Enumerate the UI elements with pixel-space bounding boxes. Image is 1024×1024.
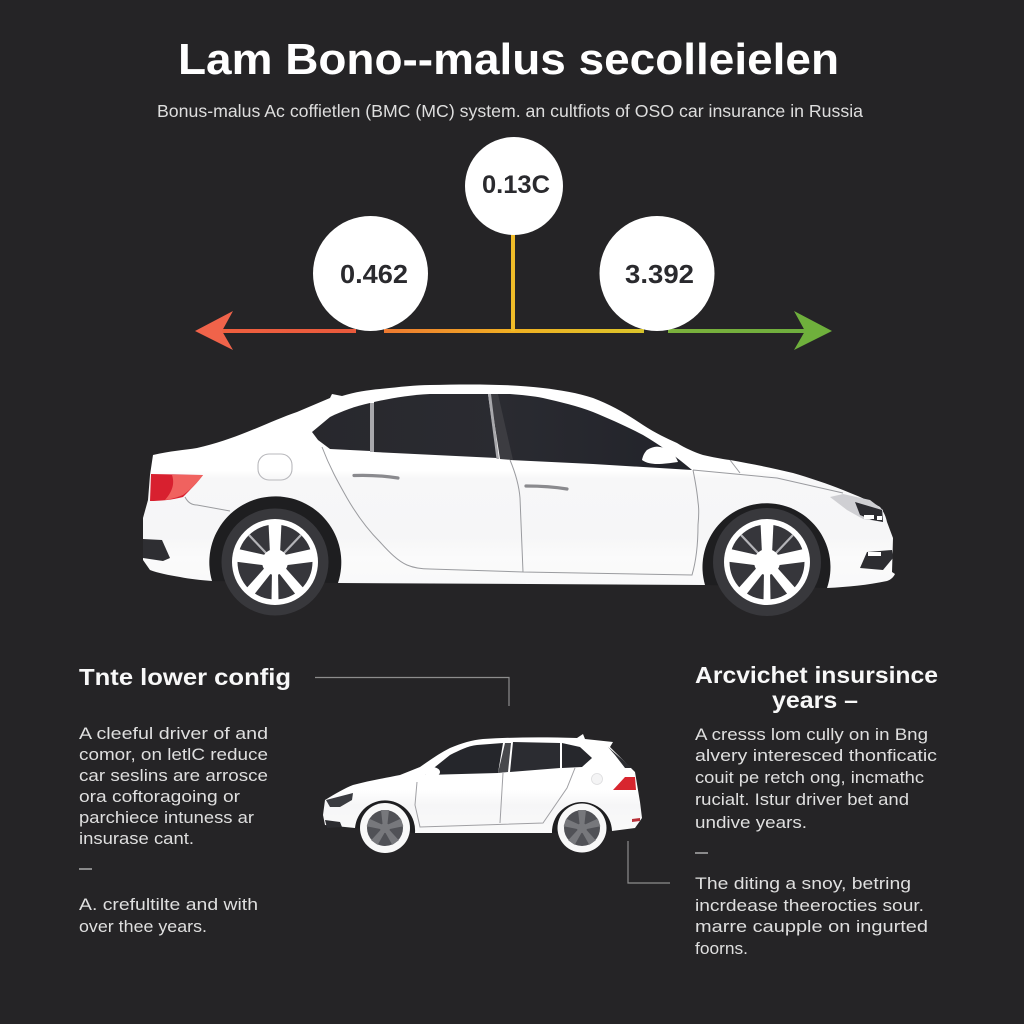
left text block 1: ora coftoragoing or <box>79 787 240 806</box>
right heading: Arcvichet insursince <box>695 662 938 688</box>
circle: 0.13C <box>465 137 563 235</box>
right text block 2: incrdease theerocties sour. <box>695 896 924 915</box>
connector line top <box>315 678 509 706</box>
right text block 1: A cresss lom cully on in Bng <box>695 725 928 744</box>
door lines <box>185 447 843 575</box>
rear wheel <box>222 508 328 616</box>
front wheel <box>360 803 410 853</box>
left text block 1: comor, on letlC reduce <box>79 745 268 764</box>
circle: 0.13C: 0.13C <box>482 171 550 199</box>
right text block 1 <box>695 725 938 853</box>
tail light <box>613 777 636 790</box>
mirror <box>424 767 440 777</box>
rear reflector <box>632 818 640 822</box>
right text block 1: rucialt. Istur driver bet and <box>695 790 909 809</box>
right text block 1: alvery interesced thonficatic <box>695 746 938 765</box>
tail light <box>150 474 203 501</box>
right heading <box>695 662 938 713</box>
connector line bottom <box>628 841 670 883</box>
door handles <box>354 475 398 478</box>
headlight <box>830 494 883 522</box>
arrow: right green <box>794 311 832 350</box>
arrow: left red <box>195 311 233 350</box>
front grille <box>860 550 893 570</box>
scale line <box>222 232 805 331</box>
subtitle: Bonus-malus Ac coffietlen (BMC (MC) system. an cultfiots of OSO car insurance in Russia <box>157 101 863 121</box>
front wheel <box>713 508 821 616</box>
coefficient scale chart <box>195 137 832 350</box>
fuel cap <box>592 774 602 784</box>
left text block 2: over thee years. <box>79 917 207 936</box>
left text block 1: A cleeful driver of and <box>79 724 268 743</box>
circle: 3.392: 3.392 <box>625 259 694 289</box>
front fog light <box>325 820 342 828</box>
rear reflector <box>143 539 170 561</box>
left text block 1: parchiece intuness ar <box>79 808 254 827</box>
left heading: Tnte lower config <box>79 664 291 690</box>
door lines <box>415 768 575 827</box>
right text block 1: undive years. <box>695 813 807 832</box>
large white sedan <box>143 384 895 616</box>
car body <box>143 384 895 588</box>
right text block 2 <box>695 874 928 958</box>
fuel cap <box>258 454 292 480</box>
right text block 2: marre caupple on ingurted <box>695 917 928 936</box>
left text block 1: insurase cant. <box>79 829 194 848</box>
left text block 2: A. crefultilte and with <box>79 895 258 914</box>
left text block 1: car seslins are arrosce <box>79 766 268 785</box>
windows <box>312 394 692 470</box>
circle: 3.392 <box>600 216 714 331</box>
windows <box>425 742 632 775</box>
rear wheel <box>558 804 606 852</box>
left text block 1 <box>79 724 268 869</box>
right text block 2: The diting a snoy, betring <box>695 874 911 893</box>
right heading: years – <box>772 687 858 713</box>
mirror <box>642 447 678 464</box>
circle: 0.462: 0.462 <box>340 259 408 289</box>
right text block 1: couit pe retch ong, incmathc <box>695 768 925 787</box>
circle: 0.462 <box>313 216 428 331</box>
car body <box>323 734 642 833</box>
small white hatchback <box>323 734 642 853</box>
right text block 2: foorns. <box>695 939 748 958</box>
title: Lam Bono--malus secolleielen <box>178 35 839 84</box>
left text block 2 <box>79 895 258 936</box>
wheel arches <box>355 800 612 833</box>
headlight <box>326 793 353 807</box>
wheel arches <box>209 496 830 588</box>
